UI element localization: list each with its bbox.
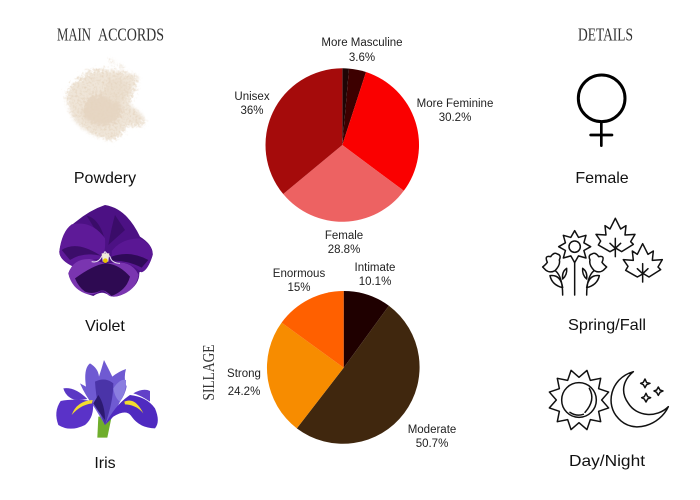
label: intimate: Intimate [355,262,395,274]
heading: main accords: MAIN [57,24,91,44]
label: Female: Female [575,170,629,187]
label: Spring/Fall: Spring/Fall [568,317,646,334]
label: intimate: 10.1% [359,276,391,288]
label: female share: 28.8% [328,244,360,256]
label: Violet: Violet [85,318,125,335]
label: moderate: Moderate [408,424,456,436]
label: female share: Female [325,230,363,242]
label: moderate: 50.7% [416,438,448,450]
heading: sillage: SILLAGE [199,344,218,400]
heading: main accords: ACCORDS [98,24,164,44]
label: strong: Strong [227,368,261,380]
slice: intimate [344,291,389,368]
slice: moderate [297,306,420,444]
slice: male [342,68,349,145]
icon: female symbol [578,75,625,146]
label: enormous: Enormous [273,268,325,280]
label: unisex: 36% [240,105,264,117]
label: Iris: Iris [94,455,116,472]
slice: unisex [266,68,342,194]
label: unisex: Unisex [234,91,270,103]
pie chart: gender [266,68,419,222]
label: more feminine: More Feminine [417,98,493,110]
heading: main accords [57,24,164,44]
icon: powder [67,60,144,140]
label: more feminine: 30.2% [439,112,471,124]
icon: violet flower [59,205,153,297]
label: strong: 24.2% [228,386,260,398]
pie chart: sillage [267,291,420,444]
label: Day/Night: Day/Night [569,453,646,470]
icon: iris flower [56,360,158,438]
slice: enormous [282,291,344,368]
slice: female [283,145,404,222]
heading: details: DETAILS [578,24,633,44]
slice: strong [267,323,344,428]
label: Powdery: Powdery [74,170,136,187]
label: enormous: 15% [287,282,311,294]
label: more masculine: More Masculine [321,37,403,49]
slice: more feminine [342,72,419,191]
slice: more masculine [342,69,366,145]
icon: sun and moon [541,362,668,438]
icon: flowers and leaves [543,218,662,295]
label: more masculine: 3.6% [349,52,375,64]
